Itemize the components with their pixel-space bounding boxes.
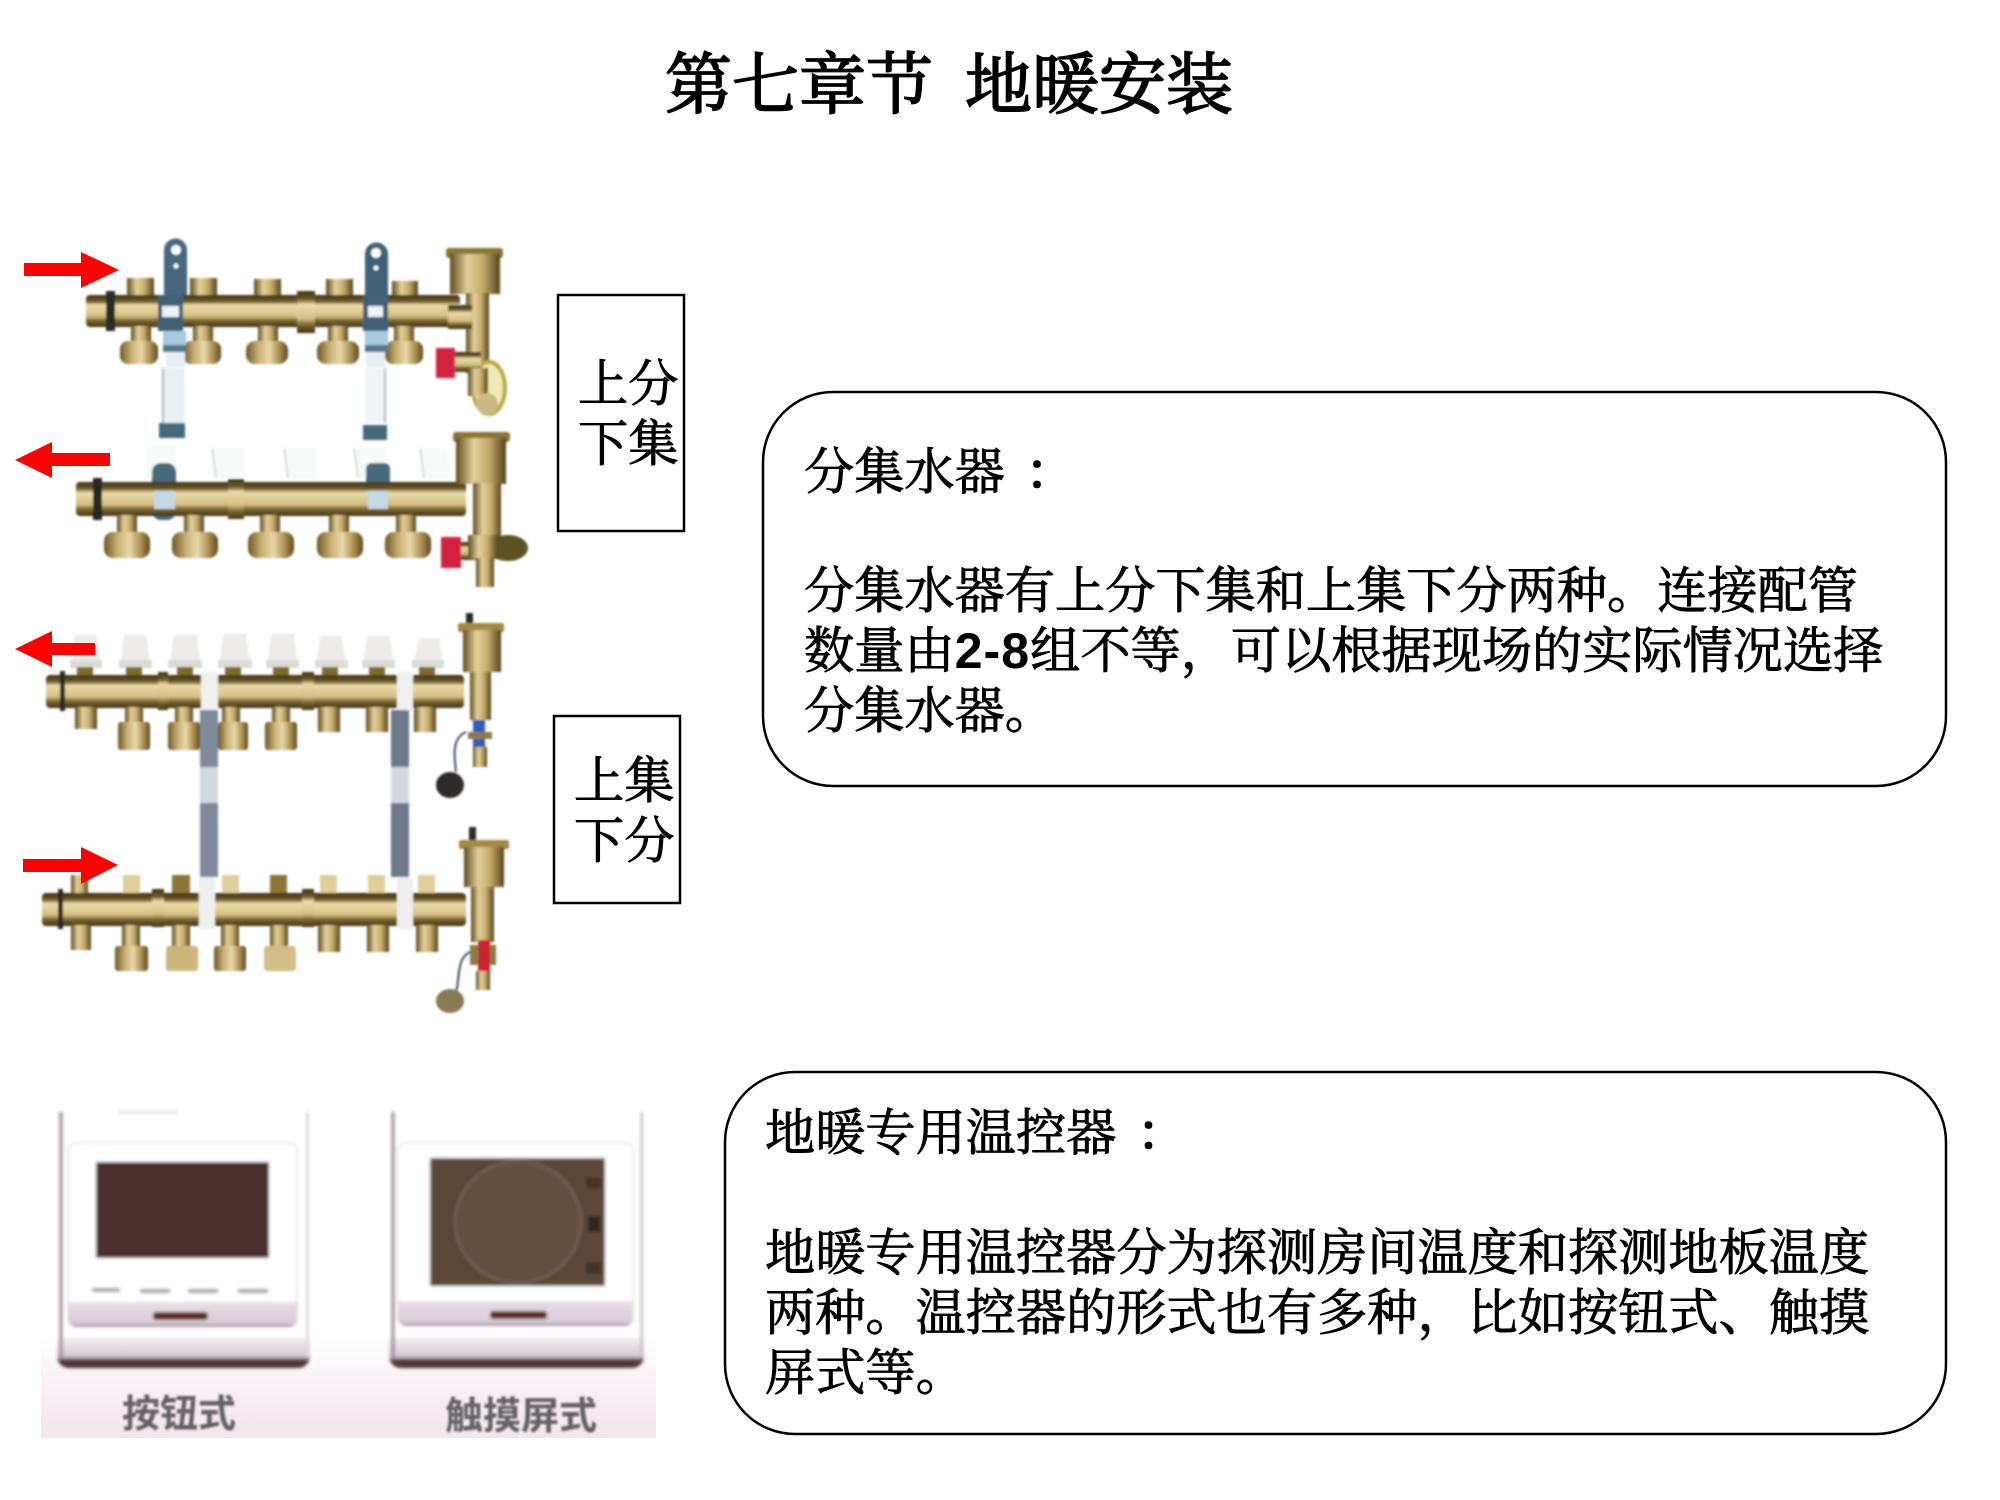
photo: thermostats: [41, 1080, 656, 1438]
thermostat body text: 地暖专用温控器分为探测房间温度和探测地板温度: [765, 1225, 1869, 1281]
caption: button type: 按钮式: [122, 1394, 236, 1436]
title: 第七章节: [665, 49, 933, 123]
title: 地暖安装: [965, 49, 1233, 123]
manifold body text: 数量由2-8组不等，可以根据现场的实际情况选择: [804, 623, 1883, 679]
label box: upper collection, lower distribution: 下分: [574, 813, 674, 869]
label box: upper distribution, lower collection: 上分: [578, 356, 678, 412]
thermostat heading: 地暖专用温控器 ：: [765, 1105, 1187, 1161]
panel: manifold description: [763, 392, 1946, 786]
lower manifold A: [76, 368, 528, 587]
top manifold B: [46, 613, 504, 877]
thermostat: touch-screen type: [389, 1110, 644, 1368]
arrow: return out, second set: [15, 631, 95, 667]
photo: upper-collection lower-distribution manifold: [42, 613, 509, 1013]
arrow: supply in, second set: [23, 847, 118, 884]
thermostat body text: 屏式等。: [765, 1345, 966, 1401]
manifold body text: 分集水器。: [804, 683, 1055, 739]
label box: upper distribution, lower collection: 下集: [578, 416, 678, 472]
arrow: return out, lower manifold: [15, 442, 110, 478]
thermostat: button type: [57, 1110, 310, 1368]
panel: thermostat description: [725, 1072, 1946, 1434]
manifold body text: [804, 563, 1883, 739]
label box: upper collection, lower distribution: 上集: [574, 753, 674, 809]
label box: upper collection, lower distribution: [554, 716, 680, 903]
lower manifold B: [42, 827, 509, 1013]
top manifold A: [86, 239, 505, 415]
photo: upper-distribution lower-collection manifold: [76, 239, 528, 587]
arrow: supply in, top manifold: [24, 252, 119, 288]
thermostat body text: 两种。温控器的形式也有多种，比如按钮式、触摸: [765, 1285, 1869, 1341]
label box: upper distribution, lower collection: [558, 295, 684, 531]
manifold heading: 分集水器 ：: [804, 444, 1076, 500]
caption: touch-screen type: 触摸屏式: [445, 1396, 597, 1438]
manifold body text: 分集水器有上分下集和上集下分两种。连接配管: [804, 563, 1858, 619]
thermostat body text: [765, 1225, 1869, 1401]
